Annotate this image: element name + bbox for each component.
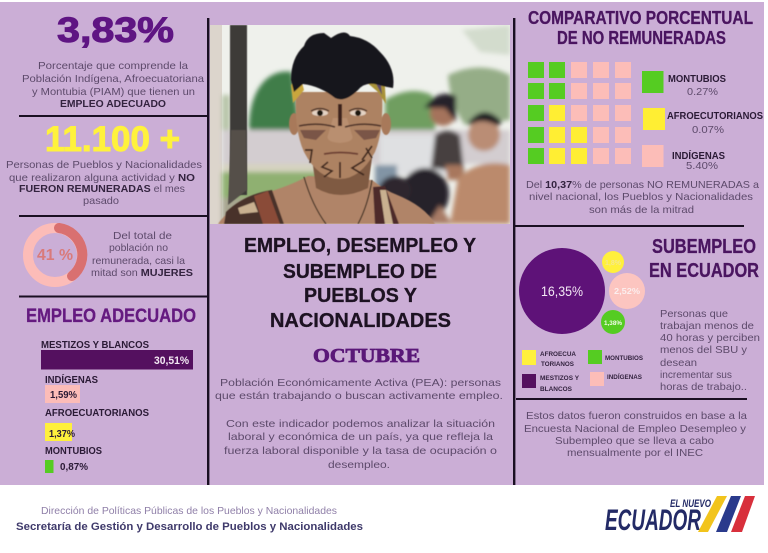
bar: afroecuatorianos: 1,37%: [49, 429, 75, 440]
heading: empleo adecuado: EMPLEO ADECUADO: [26, 306, 196, 327]
bar: indígenas: INDÍGENAS: [45, 373, 98, 386]
text: análisis del indicador: Con este indicador podemos analizar la situación: [226, 418, 495, 430]
nose: [328, 118, 352, 143]
legend: indígenas: 5.40%: [686, 160, 718, 172]
footer: institución: Secretaría de Gestión y Desarrollo de Pueblos y Nacionalidades: [16, 521, 363, 533]
bar: mestizos y blancos: [41, 340, 193, 370]
legend: subempleo: INDÍGENAS: [607, 372, 643, 381]
legend: subempleo: [522, 350, 644, 393]
photo: indigenous young man with face paint: [210, 25, 510, 224]
legend: subempleo: MESTIZOS Y: [540, 375, 580, 382]
text: mitad mujeres: población no: [109, 242, 168, 254]
big number: 11.100 +: 11.100 +: [45, 120, 180, 159]
text: mitad mujeres: Del total de: [113, 230, 172, 242]
text: 10,37% no remuneradas: son más de la mitrad: [589, 204, 694, 216]
subtitle: octubre: OCTUBRE: [313, 345, 420, 367]
beaded straps: [224, 190, 284, 224]
text: análisis del indicador: desempleo.: [328, 459, 390, 471]
big number: 3,83%: 3,83%: [57, 11, 174, 50]
panel: comparativo porcentual: [526, 8, 763, 216]
legend: indígenas: INDÍGENAS: [672, 149, 725, 162]
text: personas no remuneradas: [6, 159, 202, 207]
bar: montubios: MONTUBIOS: [45, 446, 102, 457]
text: personas no remuneradas: FUERON REMUNERADAS el mes: [19, 183, 185, 195]
eyes: [312, 110, 328, 116]
text: fuente INEC: Encuesta Nacional de Empleo Desempleo y: [524, 423, 747, 435]
legend: subempleo: MONTUBIOS: [605, 355, 644, 362]
text: mitad mujeres: remunerada, casi la: [92, 255, 185, 267]
text: fuente INEC: Estos datos fueron construidos en base a la: [526, 410, 747, 422]
text: 10,37% no remuneradas: [526, 179, 759, 216]
legend: montubios: [642, 71, 726, 98]
heading: subempleo: [649, 236, 759, 282]
text: definición subempleo: menos del SBU y: [660, 344, 748, 356]
title: empleo, desempleo y subempleo: SUBEMPLEO DE: [283, 261, 437, 283]
bar: indígenas: 1,59%: [50, 390, 77, 401]
bar: mestizos y blancos: 30,51%: [154, 355, 189, 367]
text: 10,37% no remuneradas: Del 10,37% de personas NO REMUNERADAS a: [526, 179, 759, 191]
neck: [312, 158, 372, 195]
text: definición subempleo: trabajan menos de: [660, 320, 754, 332]
legend: subempleo: TORIANOS: [541, 361, 575, 368]
text: análisis del indicador: [224, 418, 497, 471]
title: empleo, desempleo y subempleo: EMPLEO, DESEMPLEO Y: [244, 235, 477, 257]
necklace: [304, 177, 372, 224]
text: fuente INEC: Subempleo que se lleva a cabo: [555, 435, 714, 447]
text: definición subempleo: 40 horas y perciben: [660, 332, 760, 344]
text: definición PEA: Población Económicamente Activa (PEA): personas: [220, 377, 501, 389]
text: personas no remuneradas: pasado: [83, 195, 119, 207]
text: definición PEA: [215, 377, 503, 402]
text: definición subempleo: Personas que: [660, 308, 728, 320]
title: empleo, desempleo y subempleo: [244, 235, 477, 332]
bar: montubios: 0,87%: [60, 462, 88, 473]
logo: El Nuevo Ecuador: EL NUEVO: [670, 498, 711, 510]
panel: 41% mujeres: [28, 228, 193, 282]
background person: man on right: [450, 163, 510, 224]
title: empleo, desempleo y subempleo: PUEBLOS Y: [304, 285, 418, 307]
text: PIAM description: [22, 60, 204, 110]
text: definición subempleo: horas de trabajo..: [660, 381, 747, 393]
chart: bubbles: 1,38%: [604, 320, 622, 327]
headband: [290, 83, 304, 104]
text: análisis del indicador: fuerza laboral disponible y la tasa de ocupación o: [224, 445, 497, 457]
legend: subempleo: BLANCOS: [540, 386, 573, 393]
bar: afroecuatorianos: [45, 408, 149, 441]
chart: bubbles: 2,52%: [614, 287, 640, 296]
text: mitad mujeres: mitad son MUJERES: [91, 267, 193, 279]
text: definición subempleo: incrementar sus: [660, 369, 732, 381]
legend: montubios: 0.27%: [687, 86, 718, 98]
panel: 3,83% empleo adecuado: [22, 11, 204, 110]
text: PIAM description: EMPLEO ADECUADO: [60, 98, 166, 110]
text: fuente INEC: [524, 410, 747, 459]
panel: 11.100 + no remuneradas: [6, 120, 202, 207]
bar: afroecuatorianos: AFROECUATORIANOS: [45, 408, 149, 419]
face: [296, 92, 382, 179]
chart: bubbles: 1,8%: [605, 260, 622, 267]
legend: afroecutorianos: 0.07%: [692, 124, 724, 136]
legend: afroecutorianos: AFROECUTORIANOS: [667, 111, 763, 122]
bar: montubios: [45, 446, 102, 473]
ears: [289, 113, 299, 135]
legend: subempleo: AFROECUA: [540, 351, 576, 358]
bar: indígenas: [45, 373, 98, 403]
hair: [291, 32, 393, 99]
text: personas no remuneradas: Personas de Pueblos y Nacionalidades: [6, 159, 202, 171]
text: mitad mujeres: [91, 230, 193, 279]
bar: mestizos y blancos: MESTIZOS Y BLANCOS: [41, 340, 149, 351]
logo: El Nuevo Ecuador: ECUADOR: [605, 504, 701, 537]
chart: bubbles: 16,35%: [541, 283, 583, 299]
text: personas no remuneradas: que realizaron alguna actividad y NO: [9, 172, 195, 184]
panel: empleo adecuado bar chart: [26, 306, 196, 473]
text: definición subempleo: [660, 308, 760, 393]
text: PIAM description: Porcentaje que comprende la: [38, 60, 188, 72]
footer: institución: Dirección de Políticas Públicas de los Pueblos y Nacionalidades: [41, 505, 337, 517]
panel: subempleo en ecuador: [519, 236, 760, 393]
legend: montubios: MONTUBIOS: [668, 74, 726, 85]
footer: institución: [16, 505, 363, 533]
legend: afroecutorianos: [643, 108, 763, 136]
background person: man in grey shirt: [431, 130, 464, 172]
chart: bubbles: [519, 248, 645, 334]
text: PIAM description: Población Indígena, Afroecuatoriana: [22, 73, 204, 85]
text: fuente INEC: mensualmente por el INEC: [567, 447, 703, 459]
chart: donut 41%: 41 %: [37, 247, 73, 264]
text: definición PEA: que están trabajando o buscan activamente empleo.: [215, 390, 503, 402]
text: análisis del indicador: laboral y económica de un país, ya que refleja la: [228, 431, 493, 443]
face paint: [338, 104, 342, 126]
chart: donut 41%: [28, 228, 82, 282]
legend: indígenas: [642, 145, 725, 172]
title: empleo, desempleo y subempleo: NACIONALIDADES: [270, 310, 451, 332]
shoulders: [218, 176, 435, 224]
chart: waffle grid: [528, 62, 631, 164]
text: definición subempleo: desean: [660, 357, 697, 369]
text: PIAM description: y Montubia (PIAM) que tienen un: [32, 86, 195, 98]
heading: comparativo porcentual: DE NO REMUNERADAS: [557, 28, 726, 48]
text: 10,37% no remuneradas: nivel nacional, los Pueblos y Nacionalidades: [529, 191, 753, 203]
background child head: [401, 168, 449, 220]
heading: comparativo porcentual: [528, 8, 753, 48]
